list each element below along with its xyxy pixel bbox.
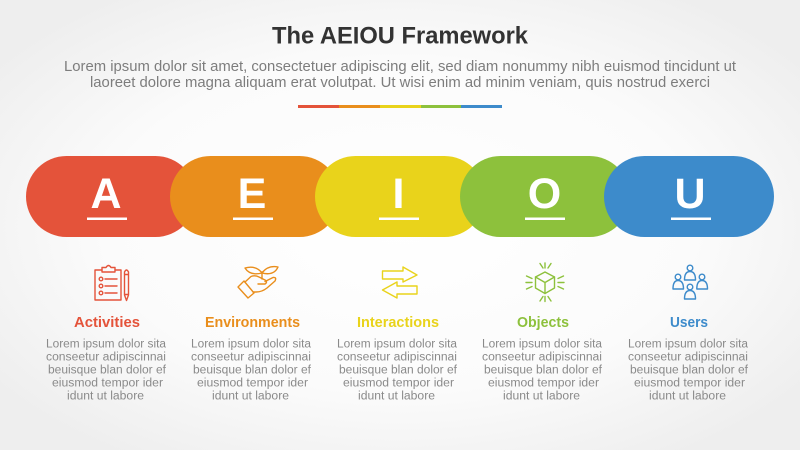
pill: E (170, 156, 340, 237)
text block: Activities (46, 338, 167, 402)
text block: Activities: Lorem ipsum dolor sita (46, 338, 167, 350)
pill chain (26, 156, 774, 237)
intro text block (64, 59, 736, 91)
text block: Interactions: eiusmod tempor ider (343, 378, 454, 390)
heading: Environments: Environments (205, 315, 300, 331)
text block: Activities: eiusmod tempor ider (52, 378, 163, 390)
text block: Environments: Lorem ipsum dolor sita (191, 338, 312, 350)
text block: Interactions: Lorem ipsum dolor sita (337, 338, 458, 350)
text block: Objects: beuisque blan dolor ef (484, 364, 603, 376)
text block: Objects: idunt ut labore (503, 390, 580, 402)
text block: Activities: conseetur adipiscinnai (46, 352, 166, 364)
title: The AEIOU Framework (272, 22, 528, 50)
text block: Environments: idunt ut labore (212, 390, 289, 402)
text block: Environments: conseetur adipiscinnai (191, 352, 311, 364)
text block: Environments: eiusmod tempor ider (197, 378, 308, 390)
text block: Objects: conseetur adipiscinnai (482, 352, 602, 364)
column: Users (628, 315, 749, 402)
text block: Users: eiusmod tempor ider (634, 378, 745, 390)
intro text block: Lorem ipsum dolor sit amet, consectetuer adipiscing elit, sed diam nonummy nibh euismod tincidunt ut (64, 59, 736, 75)
icon: group of users (673, 265, 708, 299)
heading: Activities: Activities (74, 315, 140, 331)
pill: I: I (393, 170, 404, 218)
text block: Users: conseetur adipiscinnai (628, 352, 748, 364)
text block: Users: Lorem ipsum dolor sita (628, 338, 749, 350)
text block: Objects: eiusmod tempor ider (488, 378, 599, 390)
column: Interactions (337, 315, 458, 402)
column: Environments (191, 315, 312, 402)
text block: Interactions (337, 338, 458, 402)
text block: Interactions: conseetur adipiscinnai (337, 352, 457, 364)
heading: Interactions: Interactions (357, 315, 439, 331)
text block: Activities: idunt ut labore (67, 390, 144, 402)
pill: U (604, 156, 774, 237)
text block: Environments (191, 338, 312, 402)
pill: A (26, 156, 196, 237)
text block: Objects (482, 338, 603, 402)
icon: glowing cube (526, 263, 564, 302)
pill: O (460, 156, 630, 237)
heading: Users: Users (670, 315, 708, 331)
column: Activities (46, 315, 167, 402)
pill: I (315, 156, 485, 237)
intro text block: laoreet dolore magna aliquam erat volutpat. Ut wisi enim ad minim veniam, quis nostrud exerci (90, 75, 710, 91)
text block: Users: idunt ut labore (649, 390, 726, 402)
pill: A: A (90, 170, 122, 218)
column: Objects (482, 315, 603, 402)
icon: hand holding plant (238, 267, 278, 298)
icon: clipboard and pencil (95, 266, 128, 300)
text block: Activities: beuisque blan dolor ef (48, 364, 167, 376)
text block: Interactions: beuisque blan dolor ef (339, 364, 458, 376)
rainbow divider bar (298, 105, 502, 108)
icon: exchange arrows (382, 267, 417, 298)
pill: E: E (238, 170, 266, 218)
pill: O: O (528, 170, 561, 218)
text block: Environments: beuisque blan dolor ef (193, 364, 312, 376)
heading: Objects: Objects (517, 315, 569, 331)
text block: Users: beuisque blan dolor ef (630, 364, 749, 376)
text block: Interactions: idunt ut labore (358, 390, 435, 402)
text block: Objects: Lorem ipsum dolor sita (482, 338, 603, 350)
pill: U: U (674, 170, 706, 218)
text block: Users (628, 338, 749, 402)
